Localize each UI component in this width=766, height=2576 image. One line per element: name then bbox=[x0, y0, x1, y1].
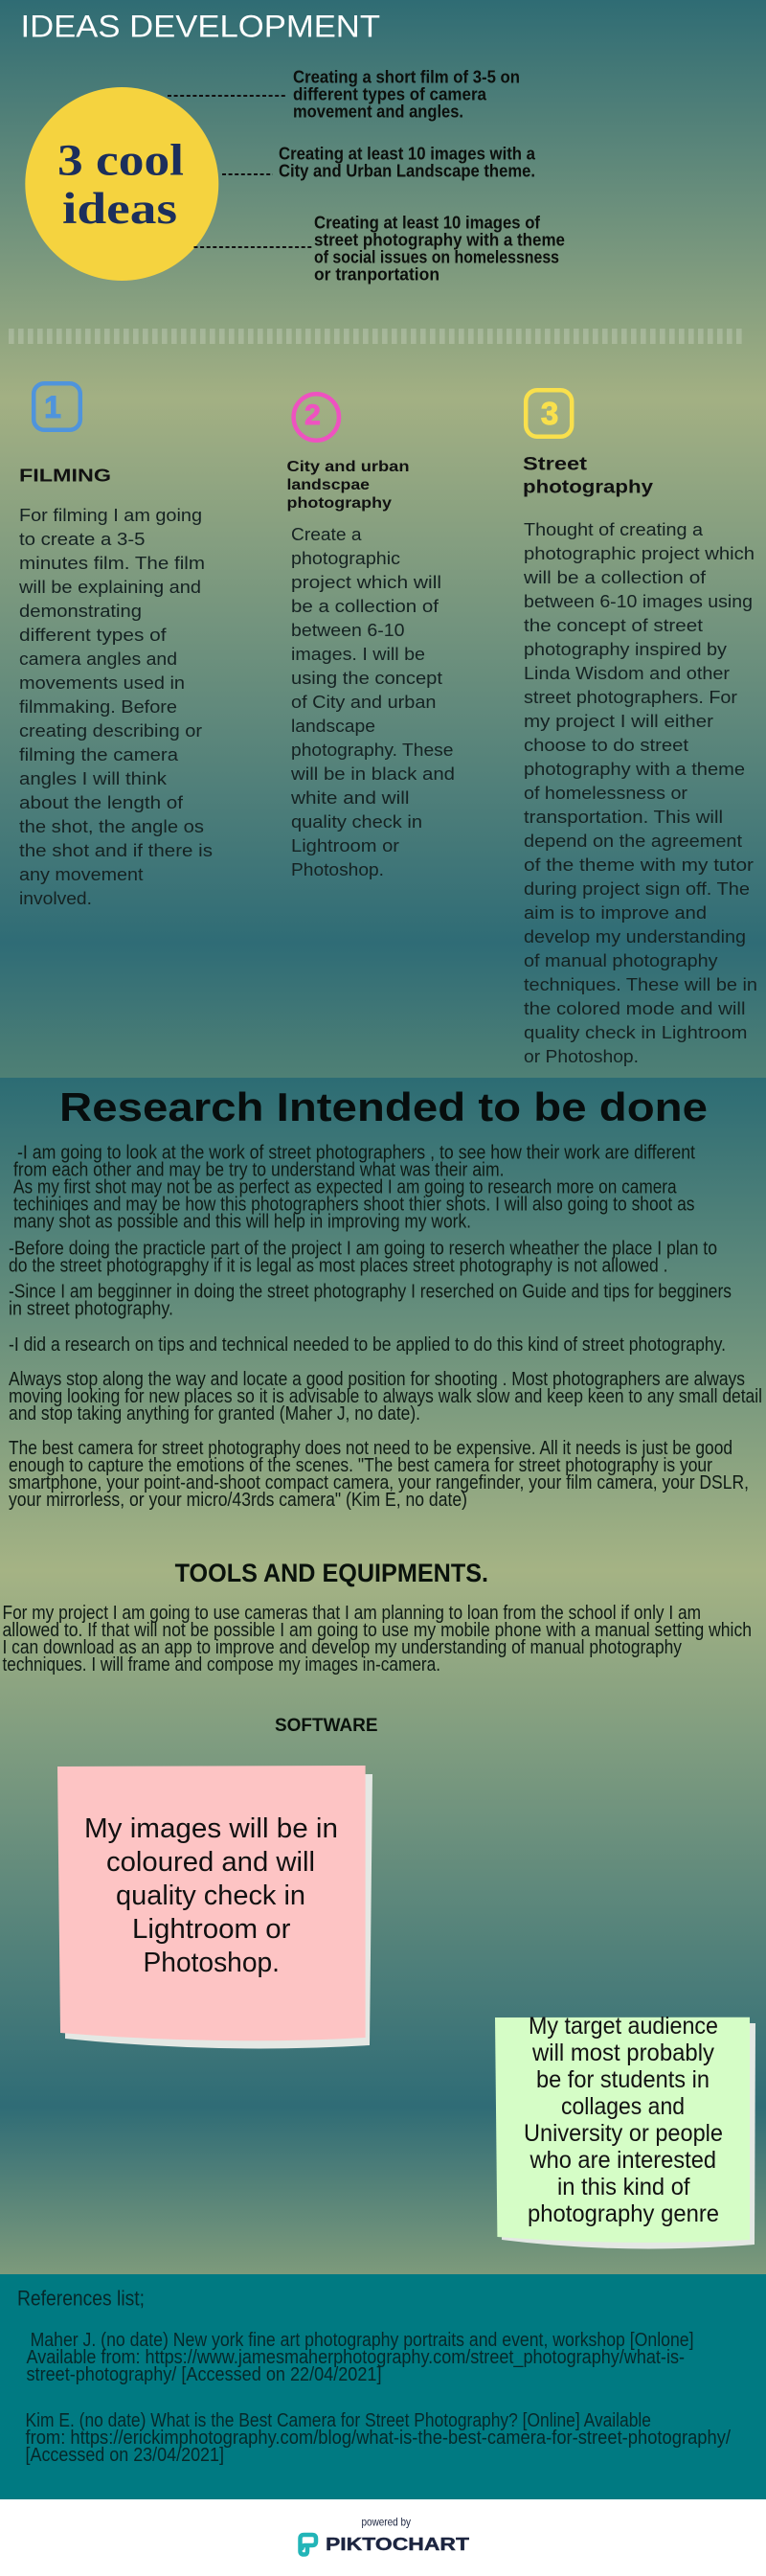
sticky note: software: coloured and will bbox=[106, 1847, 315, 1878]
text block: street photography description bbox=[523, 520, 757, 1066]
text block: filming description: angles I will think bbox=[19, 769, 168, 788]
heading: street photography: Street bbox=[523, 454, 588, 475]
icon: number 2: 2 bbox=[304, 399, 321, 431]
text block: street photography description: the colored mode and will bbox=[524, 999, 745, 1018]
text block: research notes: in street photography. bbox=[9, 1298, 173, 1319]
panel: research background bbox=[0, 1078, 766, 2274]
text block: street photography description: the concept of street bbox=[524, 616, 703, 635]
text block: filming description: different types of bbox=[19, 626, 168, 645]
text block: street photography description: choose to do street bbox=[524, 736, 688, 755]
text block: street photography description: quality check in Lightroom bbox=[524, 1023, 747, 1042]
text block: tools and equipments: I can download as an app to improve and develop my understanding of manual photography bbox=[2, 1637, 682, 1658]
heading: research intended to be done: Research Intended to be done bbox=[59, 1084, 708, 1129]
callout: short film idea bbox=[168, 67, 520, 122]
title: IDEAS DEVELOPMENT bbox=[21, 9, 380, 43]
sticky note: software: My images will be in bbox=[84, 1813, 338, 1844]
heading: city and urban: photography bbox=[287, 495, 392, 512]
text block: street photography description: techniques. These will be in bbox=[524, 975, 757, 994]
footer: powered by Piktochart bbox=[301, 2516, 470, 2554]
sticky note: software: quality check in bbox=[116, 1881, 305, 1911]
text block: street photography description: between 6-10 images using bbox=[524, 592, 753, 611]
callout: short film idea: different types of camera bbox=[293, 84, 487, 104]
callout: street photography idea bbox=[193, 213, 565, 285]
text block: filming description: involved. bbox=[19, 889, 92, 908]
panel: street photography column bbox=[523, 390, 757, 1066]
panel: filming column bbox=[18, 383, 213, 908]
text block: filming description: the shot, the angle os bbox=[19, 817, 204, 836]
callout: city and urban idea bbox=[222, 144, 536, 181]
text block: city and urban description: landscape bbox=[291, 717, 375, 736]
text block: research notes bbox=[9, 1142, 762, 1511]
text block: research notes: As my first shot may not be as perfect as expected I am going to research more on camera bbox=[13, 1176, 677, 1197]
heading: filming: FILMING bbox=[19, 466, 111, 486]
icon: 3 cool ideas circle bbox=[25, 87, 218, 281]
text block: tools and equipments: techniques. I will frame and compose my images in-camera. bbox=[2, 1654, 440, 1676]
text block: filming description: camera angles and bbox=[19, 650, 177, 669]
text block: city and urban description: images. I will be bbox=[291, 645, 425, 664]
text block: street photography description: of manual photography bbox=[524, 951, 718, 970]
callout: street photography idea: Creating at least 10 images of bbox=[314, 213, 541, 233]
sticky note: target audience: will most probably bbox=[531, 2040, 714, 2066]
text block: city and urban description: between 6-10 bbox=[291, 621, 404, 640]
text block: street photography description: Thought of creating a bbox=[524, 520, 704, 539]
sticky note: software: Lightroom or bbox=[132, 1914, 291, 1945]
text block: reference Kim: Kim E. (no date) What is the Best Camera for Street Photography? [Online] Available bbox=[25, 2410, 651, 2431]
text block: city and urban description: using the concept bbox=[291, 669, 442, 688]
text block: reference Maher: street-photography/ [Accessed on 22/04/2021] bbox=[27, 2364, 381, 2385]
text block: city and urban description: of City and urban bbox=[291, 693, 437, 712]
sticky note: target audience bbox=[495, 2013, 755, 2248]
text block: street photography description: during project sign off. The bbox=[524, 879, 750, 899]
sticky note: software bbox=[57, 1766, 372, 2048]
text block: filming description: any movement bbox=[19, 865, 144, 884]
icon: number 3: 3 bbox=[541, 396, 558, 431]
heading: street photography: photography bbox=[523, 477, 653, 498]
text block: city and urban description: Create a bbox=[291, 525, 363, 544]
text block: street photography description: street photographers. For bbox=[524, 688, 737, 707]
sticky note: target audience: photography genre bbox=[528, 2200, 719, 2227]
text block: reference Kim bbox=[25, 2410, 731, 2466]
sticky note: target audience: collages and bbox=[561, 2093, 685, 2120]
callout: street photography idea: street photography with a theme bbox=[314, 230, 565, 250]
text block: filming description bbox=[18, 506, 213, 908]
text block: city and urban description: quality check in bbox=[291, 812, 422, 832]
text block: street photography description: photographic project which bbox=[524, 544, 755, 563]
heading: tools and equipments: TOOLS AND EQUIPMENTS. bbox=[175, 1559, 488, 1587]
text block: street photography description: of homelessness or bbox=[524, 784, 687, 803]
callout: street photography idea: or tranportation bbox=[314, 264, 439, 285]
text block: filming description: to create a 3-5 bbox=[19, 530, 146, 549]
text block: city and urban description: Lightroom or bbox=[291, 836, 399, 855]
text block: reference Kim: [Accessed on 23/04/2021] bbox=[25, 2445, 224, 2466]
icon: number 1: 1 bbox=[44, 390, 61, 424]
text block: city and urban description: photography. These bbox=[291, 741, 454, 760]
callout: city and urban idea: Creating at least 10 images with a bbox=[279, 144, 536, 164]
text block: research notes: your mirrorless, or your micro/43rds camera" (Kim E, no date) bbox=[9, 1490, 467, 1511]
panel: ideas background bbox=[0, 0, 766, 1078]
sticky note: target audience: be for students in bbox=[536, 2066, 710, 2093]
panel: references background bbox=[0, 2274, 766, 2499]
sticky note: target audience: University or people bbox=[524, 2120, 723, 2147]
text block: city and urban description bbox=[290, 525, 455, 879]
text block: street photography description: my project I will either bbox=[524, 712, 713, 731]
icon: 3 cool ideas circle: 3 cool bbox=[57, 135, 184, 185]
heading: city and urban bbox=[287, 459, 410, 512]
text block: street photography description: will be a collection of bbox=[523, 568, 707, 587]
text block: street photography description: depend on the agreement bbox=[524, 832, 742, 851]
text block: filming description: about the length of bbox=[19, 793, 184, 812]
text block: filming description: will be explaining and bbox=[18, 578, 201, 597]
text block: filming description: creating describing or bbox=[19, 721, 202, 741]
text block: street photography description: photography with a theme bbox=[524, 760, 745, 779]
icon: number 1 bbox=[34, 383, 80, 430]
sticky note: target audience: who are interested bbox=[529, 2147, 716, 2174]
text block: street photography description: develop my understanding bbox=[524, 927, 746, 946]
icon: Piktochart logo bbox=[301, 2535, 316, 2554]
footer: powered by Piktochart: powered by bbox=[362, 2516, 411, 2529]
text block: reference Maher: Available from: https://www.jamesmaherphotography.com/street_photography/what-is- bbox=[27, 2347, 685, 2368]
heading: street photography bbox=[523, 454, 653, 498]
text block: filming description: the shot and if there is bbox=[19, 841, 213, 860]
text block: reference Maher bbox=[27, 2330, 693, 2385]
text block: city and urban description: white and will bbox=[290, 788, 410, 808]
heading: city and urban: City and urban bbox=[287, 459, 410, 475]
text block: research notes: do the street photograpghy if it is legal as most places street photography is not allowed . bbox=[9, 1255, 668, 1276]
text block: city and urban description: photographic bbox=[291, 549, 400, 568]
sticky note: target audience: in this kind of bbox=[557, 2174, 690, 2200]
text block: filming description: filmmaking. Before bbox=[19, 697, 177, 717]
callout: city and urban idea: City and Urban Landscape theme. bbox=[279, 161, 535, 181]
text block: street photography description: aim is to improve and bbox=[524, 903, 707, 923]
icon: number 2 bbox=[294, 394, 339, 441]
panel: city and urban column bbox=[287, 394, 455, 879]
text block: street photography description: Linda Wisdom and other bbox=[524, 664, 730, 683]
text block: street photography description: of the theme with my tutor bbox=[524, 855, 754, 875]
text block: filming description: movements used in bbox=[19, 673, 185, 693]
text block: reference Maher: Maher J. (no date) New york fine art photography portraits and event, workshop [Onlone] bbox=[31, 2330, 694, 2351]
text block: filming description: minutes film. The film bbox=[19, 554, 205, 573]
icon: number 3 bbox=[526, 390, 572, 437]
text block: city and urban description: project which will bbox=[291, 573, 441, 592]
text block: street photography description: transportation. This will bbox=[524, 808, 723, 827]
text block: city and urban description: will be in black and bbox=[290, 764, 455, 784]
sticky note: target audience: My target audience bbox=[529, 2013, 718, 2040]
text block: city and urban description: Photoshop. bbox=[291, 860, 384, 879]
text block: research notes: many shot as possible and this will help in improving my work. bbox=[13, 1211, 471, 1232]
callout: short film idea: movement and angles. bbox=[293, 102, 463, 122]
callout: short film idea: Creating a short film of 3-5 on bbox=[293, 67, 520, 87]
callout: street photography idea: of social issues on homelessness bbox=[314, 247, 559, 267]
text block: research notes: -I am going to look at the work of street photographers , to see how their work are different bbox=[17, 1142, 695, 1163]
text block: research notes: from each other and may be try to understand what was their aim. bbox=[13, 1159, 504, 1180]
heading: references list: References list; bbox=[17, 2287, 145, 2311]
text block: research notes: and stop taking anything for granted (Maher J, no date). bbox=[9, 1403, 420, 1425]
sticky note: software: Photoshop. bbox=[144, 1948, 280, 1978]
text block: street photography description: photography inspired by bbox=[524, 640, 727, 659]
text block: city and urban description: be a collection of bbox=[291, 597, 439, 616]
text block: filming description: filming the camera bbox=[19, 745, 179, 764]
text block: filming description: For filming I am going bbox=[19, 506, 202, 525]
wordmark: Piktochart: PIKTOCHART bbox=[326, 2534, 470, 2554]
heading: city and urban: landscpae bbox=[287, 477, 370, 493]
text block: tools and equipments bbox=[2, 1603, 752, 1676]
heading: software: SOFTWARE bbox=[275, 1715, 377, 1736]
text block: street photography description: or Photoshop. bbox=[524, 1047, 639, 1066]
stripe divider bbox=[9, 329, 742, 344]
icon: 3 cool ideas circle: ideas bbox=[62, 184, 177, 234]
panel: footer background bbox=[0, 2499, 766, 2576]
text block: filming description: demonstrating bbox=[19, 602, 142, 621]
